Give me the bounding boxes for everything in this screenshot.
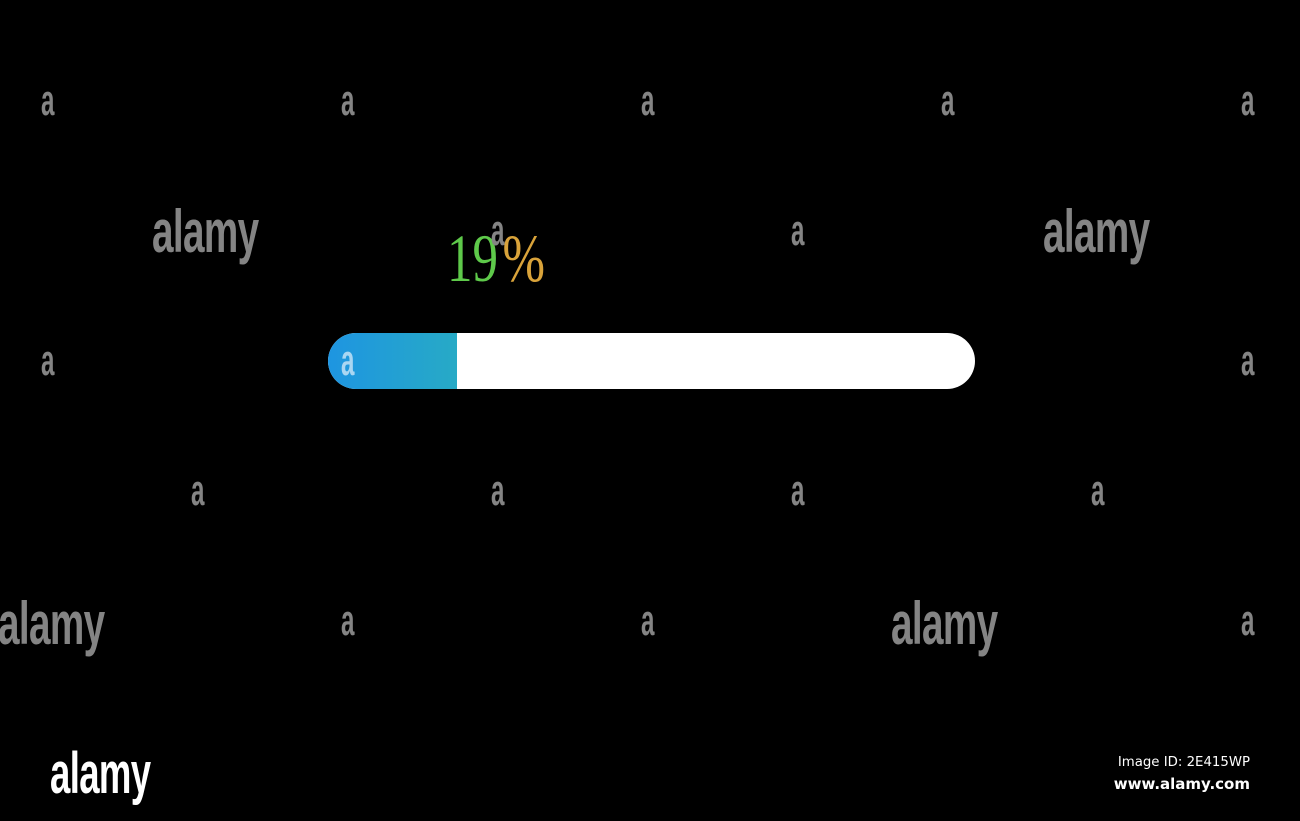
watermark small a marks: a (491, 466, 504, 515)
logo: alamy: alamy (50, 741, 150, 806)
watermark small a marks: a (1091, 466, 1104, 515)
watermark small a marks: a (41, 76, 54, 125)
watermark small a marks: a (941, 76, 954, 125)
watermark small a marks: alamy (1043, 198, 1150, 265)
percentage label: 19% (447, 220, 545, 296)
watermark small a marks: a (641, 596, 654, 645)
progress bar: a (341, 336, 354, 385)
watermark small a marks: a (341, 76, 354, 125)
watermark small a marks: a (41, 336, 54, 385)
watermark small a marks: a (1241, 76, 1254, 125)
image id text: Image ID: 2E415WP (1118, 755, 1250, 770)
image id text (1114, 755, 1250, 793)
watermark small a marks: alamy (152, 198, 259, 265)
watermark small a marks: a (1241, 596, 1254, 645)
watermark small a marks: a (1241, 336, 1254, 385)
watermark small a marks: a (641, 76, 654, 125)
progress fill (328, 333, 457, 389)
watermark small a marks: alamy (0, 590, 105, 657)
watermark small a marks: a (191, 466, 204, 515)
watermark small a marks: alamy (891, 590, 998, 657)
text: a (491, 206, 504, 255)
watermark small a marks: a (791, 466, 804, 515)
progress bar (328, 333, 975, 389)
watermark small a marks: a (341, 596, 354, 645)
image id text: www.alamy.com (1114, 775, 1250, 793)
watermark small a marks: a (791, 206, 804, 255)
